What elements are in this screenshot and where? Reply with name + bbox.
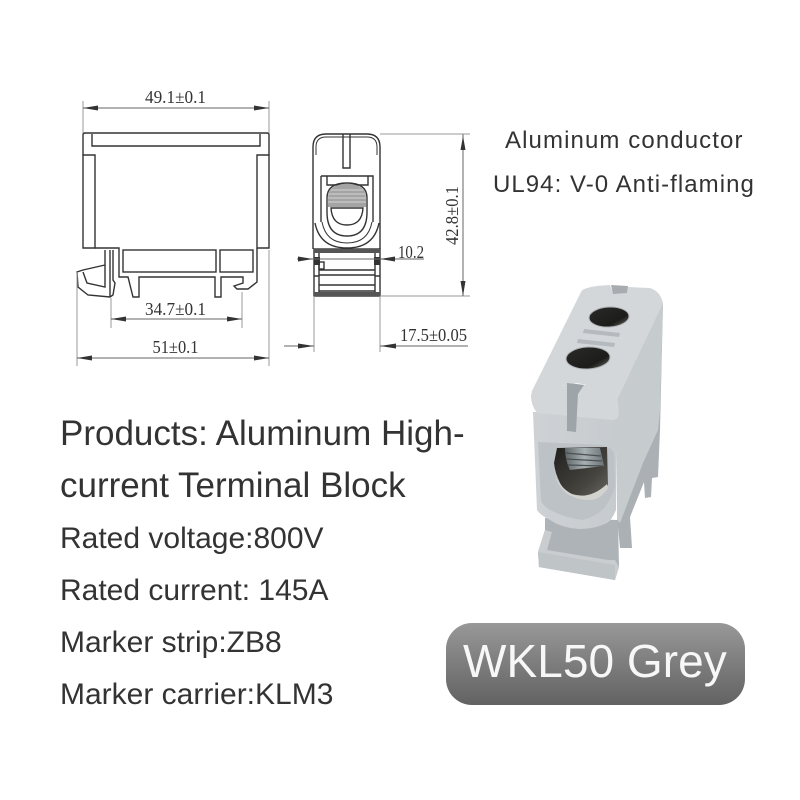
side view drawing <box>313 134 380 296</box>
bore lip <box>555 474 608 500</box>
dimension label: 34.7±0.1: 34.7±0.1 <box>145 299 206 319</box>
spec: rated current: Rated current: 145A <box>60 574 328 607</box>
spec: marker carrier: Marker carrier:KLM3 <box>60 678 333 711</box>
dimension label: 42.8±0.1: 42.8±0.1 <box>442 186 462 245</box>
screw holes <box>589 306 629 328</box>
product title: Products: Aluminum High- <box>60 414 465 453</box>
front view dimensions <box>77 101 269 366</box>
wire entry cavity <box>538 442 615 520</box>
model badge <box>446 623 745 705</box>
spec: rated voltage: Rated voltage:800V <box>60 522 324 555</box>
spec: marker strip: Marker strip:ZB8 <box>60 626 282 659</box>
mounting foot <box>538 518 619 580</box>
product photo: terminal block <box>531 285 663 580</box>
badge text: WKL50 Grey <box>463 635 727 687</box>
note: UL94 V-0: UL94: V-0 Anti-flaming <box>493 170 755 198</box>
dimension label: 51±0.1: 51±0.1 <box>152 337 198 357</box>
side view dimensions <box>284 134 470 352</box>
side face <box>617 303 663 523</box>
product title <box>60 414 465 505</box>
dimension label: 10.2: 10.2 <box>398 242 424 262</box>
cap slot <box>567 383 584 432</box>
marker grooves <box>577 329 620 347</box>
front cap <box>531 382 619 420</box>
screw <box>565 448 604 470</box>
stepped rear body <box>617 303 663 548</box>
dimension label: 17.5±0.05: 17.5±0.05 <box>400 325 467 345</box>
top face <box>532 285 663 400</box>
note: aluminum conductor: Aluminum conductor <box>505 126 744 154</box>
product title: current Terminal Block <box>60 466 406 505</box>
front view drawing <box>77 133 269 297</box>
marking slot at top <box>611 285 628 294</box>
dimension label: 49.1±0.1: 49.1±0.1 <box>145 87 206 107</box>
grooved hollow in side view <box>328 184 366 207</box>
front face <box>533 412 618 529</box>
